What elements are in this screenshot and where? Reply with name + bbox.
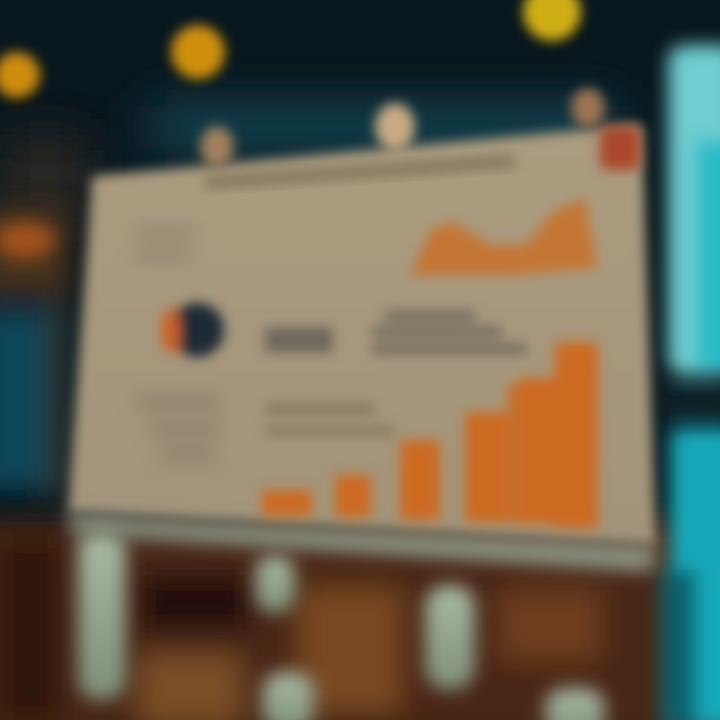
stat: dark label — [265, 327, 333, 353]
text block: chart caption — [265, 403, 395, 436]
text block: upper left notes — [135, 228, 195, 260]
board background — [68, 124, 656, 545]
candles: pale vertical blurs along the bottom — [78, 530, 605, 720]
text block: lower left notes — [135, 396, 220, 460]
board lower edge highlight — [66, 514, 658, 572]
panel: infographic board — [66, 88, 658, 572]
background: left side brown and teal blocks — [0, 205, 70, 500]
light: left orange blob — [0, 222, 55, 258]
panel: right cyan screens — [660, 45, 720, 720]
background: wooden lower area — [0, 520, 720, 720]
chart: donut — [160, 303, 224, 357]
pins: top clips — [200, 88, 605, 168]
chart: orange bar chart — [262, 342, 598, 528]
text block: center description — [372, 311, 527, 354]
heading: board title — [205, 154, 515, 190]
lights: glowing bulbs — [0, 0, 581, 98]
chart: upper area chart — [410, 198, 597, 275]
icon: red corner badge — [600, 126, 640, 170]
background: teal glow behind board — [0, 105, 620, 215]
